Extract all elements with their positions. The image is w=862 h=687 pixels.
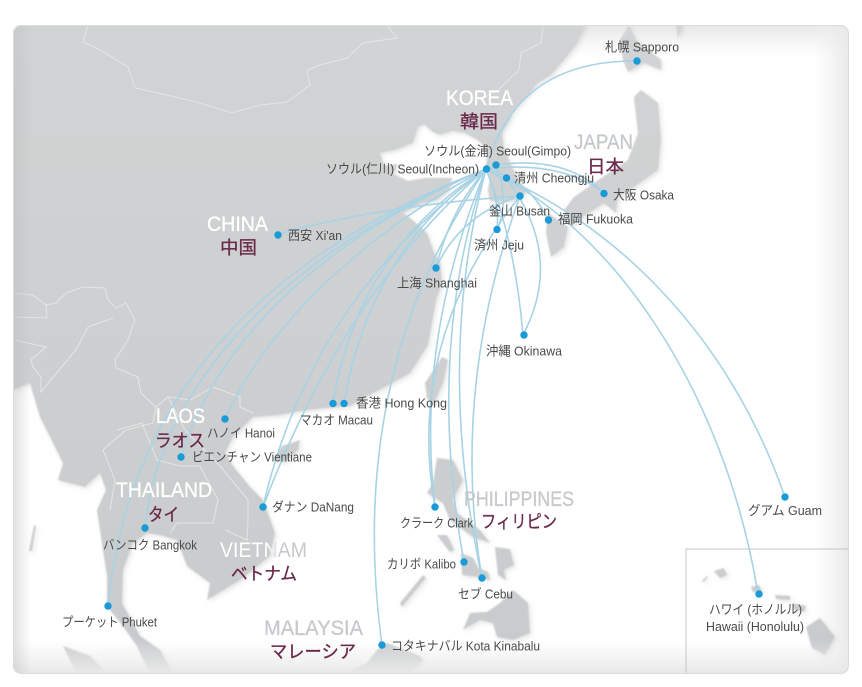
country: Korea: KOREA xyxy=(446,87,513,110)
country: Laos: LAOS xyxy=(156,405,205,428)
country: Korea Japanese: 韓国 xyxy=(460,112,498,132)
route: Da Nang second line xyxy=(263,169,486,507)
route: Cebu from Seoul xyxy=(459,169,486,578)
country: Philippines Japanese: フィリピン xyxy=(481,512,557,532)
Honshu xyxy=(564,90,661,227)
country names xyxy=(116,87,633,662)
country: Japan Japanese: 日本 xyxy=(587,157,624,177)
label: Busan: 釜山 Busan xyxy=(489,204,550,218)
label: Guam: グアム Guam xyxy=(748,503,822,518)
label: Hawaii Japanese: ハワイ (ホノルル) xyxy=(709,602,802,617)
dot: Kalibo xyxy=(460,558,468,566)
flight routes xyxy=(108,61,785,645)
country: China Japanese: 中国 xyxy=(220,238,257,258)
dot: Phuket xyxy=(104,602,112,610)
dot: Osaka xyxy=(600,190,608,197)
country: Malaysia Japanese: マレーシア xyxy=(270,642,356,662)
route: Cebu from Busan xyxy=(472,196,520,578)
country: Thailand: THAILAND xyxy=(116,479,212,502)
label: Shanghai: 上海 Shanghai xyxy=(397,276,477,290)
destination dots xyxy=(104,57,789,649)
country: Japan: JAPAN xyxy=(574,131,633,154)
label: Seoul Gimpo: ソウル(金浦) Seoul(Gimpo) xyxy=(424,144,571,158)
dot: Okinawa xyxy=(520,331,528,339)
South Asia borders xyxy=(13,287,156,407)
route: Osaka from Incheon xyxy=(486,167,604,193)
dot: Cebu xyxy=(478,574,486,582)
destination labels xyxy=(62,40,822,654)
route: Phuket xyxy=(108,169,486,606)
route: Jeju xyxy=(486,169,498,230)
label: Hanoi: ハノイ Hanoi xyxy=(207,426,275,440)
label: Hong Kong: 香港 Hong Kong xyxy=(356,396,447,410)
mainland Asia and Korea xyxy=(13,25,586,674)
Kyushu xyxy=(546,213,568,257)
route: Xi'an xyxy=(278,196,520,234)
Thailand and Cambodia border xyxy=(117,423,218,533)
label: Sapporo: 札幌 Sapporo xyxy=(605,40,679,54)
sea edge fades xyxy=(580,25,849,660)
dot: Jeju xyxy=(493,226,501,233)
label: Cebu: セブ Cebu xyxy=(458,586,513,602)
dot: Shanghai xyxy=(432,264,440,272)
label: Hawaii English: Hawaii (Honolulu) xyxy=(706,619,804,634)
route: Guam xyxy=(490,172,785,497)
Nepal border xyxy=(13,305,47,318)
route: Fukuoka xyxy=(486,169,548,220)
Vietnam and Laos border xyxy=(168,397,248,540)
Palawan xyxy=(400,575,426,607)
Myanmar and India border xyxy=(15,318,113,392)
country: Philippines: PHILIPPINES xyxy=(464,488,574,511)
route: Okinawa from Busan xyxy=(506,178,540,335)
label: Clark: クラーク Clark xyxy=(400,516,473,530)
label: Da Nang: ダナン DaNang xyxy=(272,500,354,514)
label: Bangkok: バンコク Bangkok xyxy=(103,538,197,552)
Sumatra xyxy=(63,646,100,669)
route: Clark from Busan xyxy=(429,196,520,507)
China and Vietnam border xyxy=(156,387,253,413)
Hawaii inset frame xyxy=(686,549,849,674)
country: Vietnam: VIETNAM xyxy=(220,539,307,562)
route: Hawaii xyxy=(490,172,758,594)
route: Kalibo xyxy=(449,169,486,562)
label: Vientiane: ビエンチャン Vientiane xyxy=(192,450,312,464)
Thailand and Laos borders xyxy=(103,407,156,510)
label: Fukuoka: 福岡 Fukuoka xyxy=(558,212,634,226)
Luzon xyxy=(427,458,490,543)
dot: Da Nang xyxy=(259,503,267,511)
Mindoro xyxy=(437,535,454,552)
label: Phuket: プーケット Phuket xyxy=(62,614,157,630)
country: Vietnam Japanese: ベトナム xyxy=(231,564,297,584)
label: Jeju: 済州 Jeju xyxy=(474,238,524,252)
route: Osaka from Gimpo xyxy=(496,163,604,193)
Andaman islands xyxy=(29,525,36,551)
Hokkaido xyxy=(620,25,661,72)
route: Clark from Seoul xyxy=(431,169,486,507)
Samar and Leyte xyxy=(495,547,514,580)
label: Cheongju: 清州 Cheongju xyxy=(514,170,594,186)
national borders xyxy=(13,25,543,540)
dot: Kota Kinabalu xyxy=(378,641,386,649)
route: Shanghai xyxy=(436,169,486,268)
Hainan xyxy=(273,440,300,462)
label: Macau: マカオ Macau xyxy=(300,412,373,428)
dot: Xi'an xyxy=(274,231,282,239)
label: Osaka: 大阪 Osaka xyxy=(613,188,675,202)
dot: Busan xyxy=(516,192,524,200)
dot: Sapporo xyxy=(633,57,641,65)
dot: Hong Kong xyxy=(340,400,348,407)
route: Jeju from Gimpo xyxy=(496,165,503,230)
route: Sapporo xyxy=(487,61,637,168)
route: Hanoi xyxy=(225,169,486,419)
dot: Bangkok xyxy=(141,524,149,532)
Mongolia border xyxy=(83,25,397,113)
dot: Hawaii xyxy=(755,590,763,598)
route: Bangkok xyxy=(145,169,486,528)
dot: Gimpo xyxy=(492,161,500,169)
northern island xyxy=(676,25,683,38)
route: Okinawa from Seoul xyxy=(486,169,523,335)
dot: Fukuoka xyxy=(545,216,552,224)
dot: Clark xyxy=(431,503,439,511)
Mindanao xyxy=(463,590,530,640)
route: Vientiane xyxy=(181,169,486,457)
China and Korea border xyxy=(480,27,543,100)
dot: Hanoi xyxy=(221,415,229,423)
route: Kota Kinabalu xyxy=(374,169,486,645)
Hawaii islands xyxy=(714,568,727,578)
dot: Incheon xyxy=(483,165,490,173)
dot: Guam xyxy=(781,493,789,501)
dot: Cheongju xyxy=(503,174,510,182)
Taiwan xyxy=(425,357,448,405)
dot: Vientiane xyxy=(177,453,185,461)
label: Seoul Incheon: ソウル(仁川) Seoul(Incheon) xyxy=(326,162,479,176)
country: Laos Japanese: ラオス xyxy=(155,431,205,451)
country: Malaysia: MALAYSIA xyxy=(264,617,363,640)
dot: Macau xyxy=(329,400,337,407)
route: Hong Kong xyxy=(344,169,486,403)
country: China: CHINA xyxy=(207,213,268,236)
label: Kota Kinabalu: コタキナバル Kota Kinabalu xyxy=(391,638,540,654)
label: Xi'an: 西安 Xi'an xyxy=(288,228,342,243)
country: Thailand Japanese: タイ xyxy=(148,505,179,525)
label: Kalibo: カリボ Kalibo xyxy=(387,556,456,572)
label: Okinawa: 沖縄 Okinawa xyxy=(486,344,563,358)
Borneo xyxy=(358,642,423,669)
route: Shanghai from Busan xyxy=(436,196,520,268)
Panay and Negros xyxy=(461,553,490,580)
route: Da Nang first line xyxy=(263,169,486,507)
route: Macau xyxy=(333,169,486,403)
